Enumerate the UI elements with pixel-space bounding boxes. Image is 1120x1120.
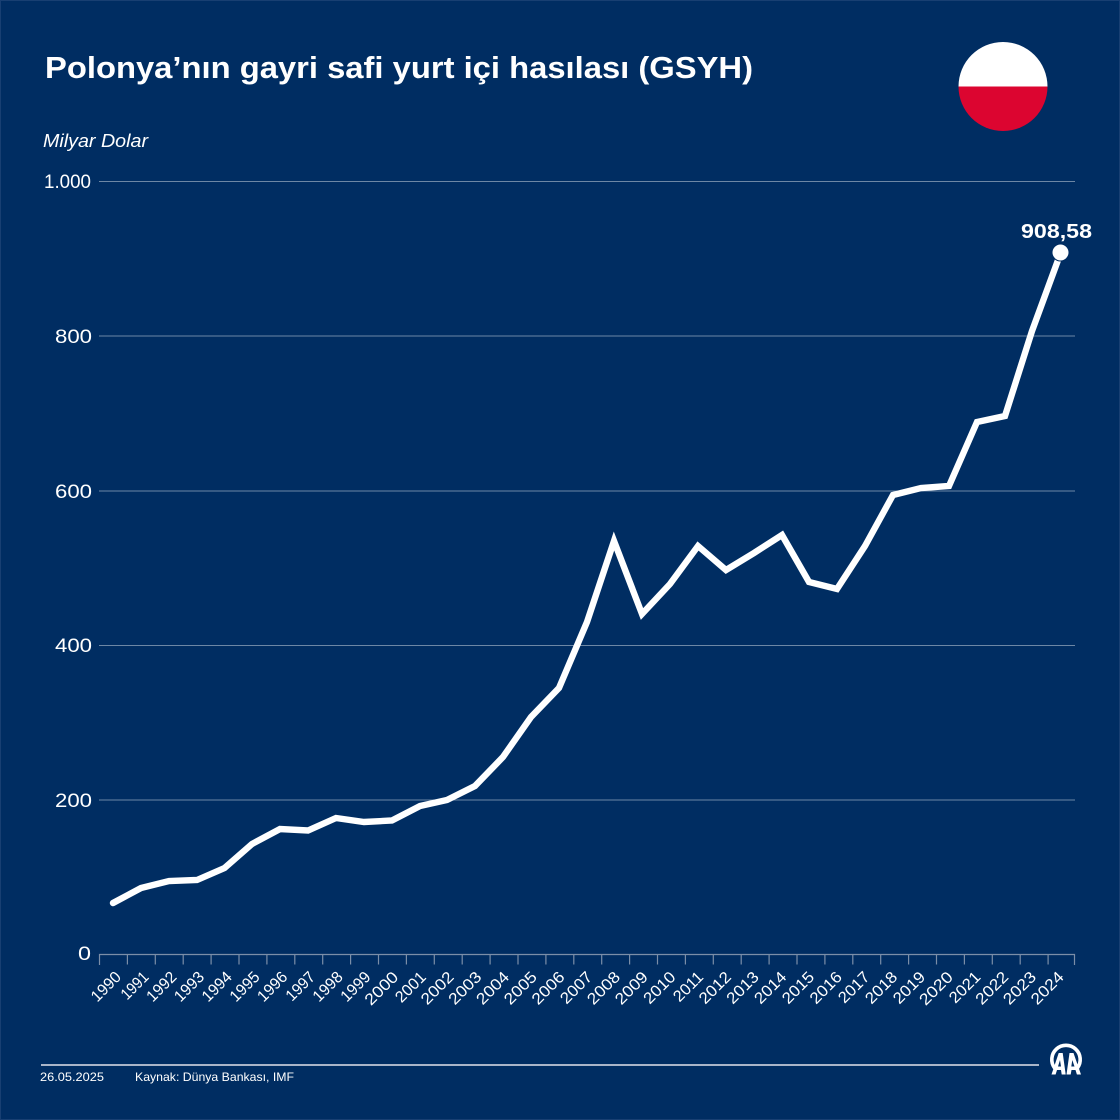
y axis grid lines: [99, 182, 1075, 800]
x axis year labels: 2006: [529, 969, 569, 1008]
x axis year labels: 2001: [392, 969, 430, 1006]
x axis year labels: 1990: [88, 969, 125, 1006]
y axis labels: [44, 172, 92, 965]
x axis year labels: 1991: [118, 969, 153, 1003]
x axis year labels: 2019: [890, 969, 929, 1008]
x axis year labels: 1994: [199, 969, 236, 1006]
x axis year labels: 2009: [612, 969, 652, 1008]
axis unit label: Milyar Dolar: [43, 131, 149, 151]
x axis year labels: 1999: [338, 969, 374, 1006]
end value label: 908,58: [1021, 221, 1092, 243]
x axis year labels: 2003: [446, 969, 485, 1008]
x axis year labels: 2007: [557, 969, 596, 1008]
y axis labels: 1.000: [44, 172, 91, 193]
y axis labels: 800: [55, 327, 92, 348]
icon: Polish flag: [958, 42, 1048, 131]
x axis with ticks: [100, 954, 1074, 965]
x axis year labels: 1996: [254, 969, 291, 1006]
x axis year labels: 1997: [283, 969, 319, 1005]
x axis year labels: 2022: [973, 969, 1012, 1008]
y axis labels: 0: [78, 944, 91, 965]
y axis labels: 600: [55, 482, 92, 503]
y axis labels: 400: [55, 636, 92, 657]
x axis year labels: 1992: [144, 969, 180, 1006]
x axis year labels: 2023: [1000, 969, 1040, 1008]
x axis year labels: 2024: [1028, 969, 1068, 1008]
x axis year labels: 2021: [946, 969, 985, 1007]
date: 26.05.2025: [40, 1070, 104, 1084]
x axis year labels: 2002: [418, 969, 458, 1008]
x axis year labels: 2005: [501, 969, 541, 1008]
x axis year labels: 2000: [362, 969, 402, 1009]
x axis year labels: 2012: [696, 969, 735, 1008]
x axis year labels: 2017: [835, 969, 874, 1007]
icon: AA logo: [1052, 1045, 1081, 1074]
y axis labels: 200: [55, 791, 92, 812]
x axis year labels: [88, 969, 1068, 1009]
x axis year labels: 2008: [584, 969, 624, 1008]
x axis year labels: 2014: [751, 969, 790, 1008]
x axis year labels: 2020: [916, 969, 957, 1009]
x axis year labels: 2013: [724, 969, 763, 1008]
x axis year labels: 2016: [807, 969, 846, 1008]
x axis year labels: 1998: [310, 969, 347, 1006]
end point marker: [1052, 244, 1069, 261]
x axis year labels: 2011: [670, 969, 707, 1006]
x axis year labels: 2015: [779, 969, 818, 1008]
source: Kaynak: Dünya Bankası, IMF: [135, 1070, 294, 1084]
x axis year labels: 1995: [227, 969, 264, 1006]
GDP line: [113, 252, 1061, 903]
x axis year labels: 2010: [641, 969, 680, 1008]
footer line: [41, 1064, 1039, 1066]
x axis year labels: 1993: [171, 969, 208, 1006]
x axis year labels: 2018: [862, 969, 901, 1008]
title: Polonya’nın gayri safi yurt içi hasılası (GSYH): [45, 50, 753, 85]
x axis year labels: 2004: [473, 969, 513, 1008]
